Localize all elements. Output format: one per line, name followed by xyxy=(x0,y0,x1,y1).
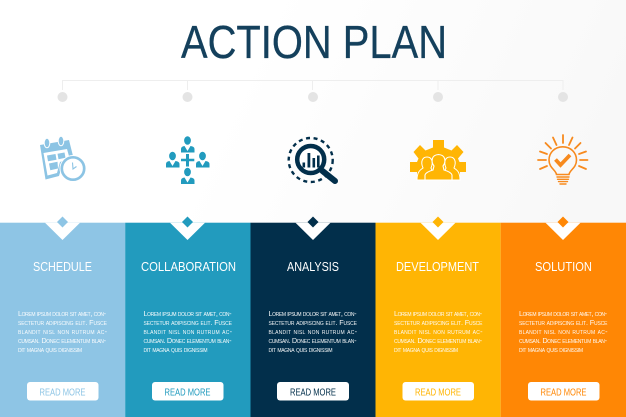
button: READ MORE xyxy=(164,386,210,398)
body text: cumsan. Donec elementum blan- xyxy=(519,336,608,345)
body text: dit magna quis dignissim xyxy=(144,345,208,354)
body text xyxy=(519,309,608,354)
body text: blandit nisl non rutrum ac- xyxy=(144,327,233,336)
body text: sectetur adipiscing elit. Fusce xyxy=(268,318,358,327)
heading: COLLABORATION xyxy=(141,259,236,274)
body text: Lorem ipsum dolor sit amet, con- xyxy=(519,309,608,318)
body text: dit magna quis dignissim xyxy=(394,345,458,354)
marker diamond xyxy=(308,216,318,228)
heading: SCHEDULE xyxy=(33,259,92,274)
marker diamond xyxy=(57,216,68,228)
body text: blandit nisl non rutrum ac- xyxy=(268,327,358,336)
body text xyxy=(394,309,483,354)
icon: magnifier with chart xyxy=(289,138,335,182)
panel: solution xyxy=(501,216,626,417)
body text: dit magna quis dignissim xyxy=(18,345,82,354)
body text: sectetur adipiscing elit. Fusce xyxy=(519,318,608,327)
button: READ MORE xyxy=(40,386,86,398)
marker diamond xyxy=(558,216,568,228)
button xyxy=(277,382,349,400)
body text: blandit nisl non rutrum ac- xyxy=(519,327,608,336)
marker diamond xyxy=(182,216,193,228)
body text: sectetur adipiscing elit. Fusce xyxy=(144,318,233,327)
body text xyxy=(144,309,233,354)
icon: calendar and clock xyxy=(40,136,86,182)
icon: team gear xyxy=(410,140,466,180)
icon: team collaboration xyxy=(166,136,210,184)
button xyxy=(27,382,98,400)
body text: blandit nisl non rutrum ac- xyxy=(18,327,108,336)
button: READ MORE xyxy=(290,386,336,398)
body text: dit magna quis dignissim xyxy=(268,345,332,354)
body text: Lorem ipsum dolor sit amet, con- xyxy=(144,309,232,318)
body text: blandit nisl non rutrum ac- xyxy=(394,327,483,336)
body text: Lorem ipsum dolor sit amet, con- xyxy=(18,309,107,318)
body text: Lorem ipsum dolor sit amet, con- xyxy=(268,309,357,318)
body text: dit magna quis dignissim xyxy=(519,345,583,354)
notch xyxy=(296,223,330,240)
body text xyxy=(18,309,108,354)
body text: cumsan. Donec elementum blan- xyxy=(268,336,357,345)
button xyxy=(152,382,224,400)
title: ACTION PLAN xyxy=(181,16,447,68)
body text: cumsan. Donec elementum blan- xyxy=(18,336,107,345)
button: READ MORE xyxy=(415,386,461,398)
notch xyxy=(45,223,80,240)
panel: collaboration xyxy=(125,216,250,417)
notch xyxy=(420,223,456,240)
body text: cumsan. Donec elementum blan- xyxy=(144,336,232,345)
marker diamond xyxy=(432,216,444,228)
notch xyxy=(170,223,205,240)
body text xyxy=(268,309,358,354)
panel: analysis xyxy=(250,216,376,417)
heading: SOLUTION xyxy=(535,259,592,274)
button: READ MORE xyxy=(540,386,586,398)
button xyxy=(402,382,474,400)
panel: schedule xyxy=(0,216,125,417)
body text: Lorem ipsum dolor sit amet, con- xyxy=(394,309,483,318)
body text: cumsan. Donec elementum blan- xyxy=(394,336,483,345)
timeline connector xyxy=(58,80,568,102)
heading: DEVELOPMENT xyxy=(396,259,479,274)
button xyxy=(528,382,600,400)
icon: light bulb with check xyxy=(538,135,588,184)
notch xyxy=(546,223,580,240)
body text: sectetur adipiscing elit. Fusce xyxy=(394,318,483,327)
heading: ANALYSIS xyxy=(287,259,339,274)
panel: development xyxy=(376,216,501,417)
body text: sectetur adipiscing elit. Fusce xyxy=(18,318,108,327)
